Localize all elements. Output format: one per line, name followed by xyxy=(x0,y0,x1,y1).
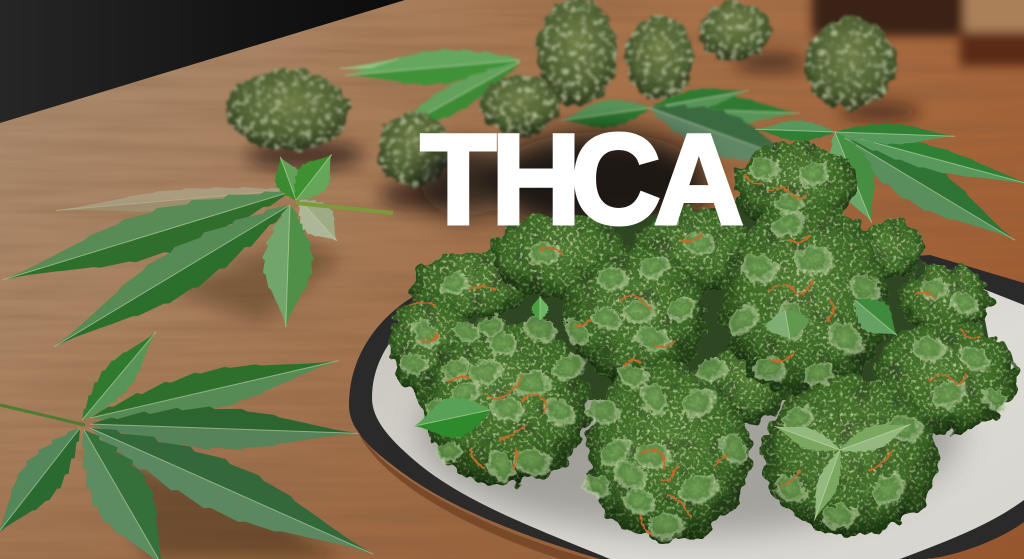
title: THCA xyxy=(420,108,744,251)
table shadows xyxy=(90,53,920,559)
bud: front left xyxy=(421,321,589,485)
bud: top right small xyxy=(700,0,770,60)
plate xyxy=(349,255,1024,559)
small leaves on buds xyxy=(409,286,915,524)
leaf: right xyxy=(755,113,1024,259)
bud: front centre xyxy=(586,362,750,542)
shadow behind title xyxy=(420,132,710,232)
bud: rear centre xyxy=(490,213,630,297)
orange hair strands xyxy=(410,175,980,535)
background buds xyxy=(226,0,895,188)
dark background corner xyxy=(0,0,405,123)
bud: left xyxy=(390,293,470,397)
bud pile xyxy=(390,141,1017,542)
bud: centre xyxy=(565,247,705,383)
blurred bottle in background xyxy=(812,0,1024,66)
bud: filler between centre and right xyxy=(705,345,785,425)
bud: rear right xyxy=(633,208,757,292)
leaf: top centre background xyxy=(340,42,527,152)
bud: behind title left xyxy=(378,112,450,188)
plate inner surface xyxy=(372,268,1024,559)
bud: right xyxy=(873,323,1017,433)
plate shadow under buds xyxy=(420,325,960,535)
plate rim xyxy=(349,255,1024,559)
mass under buds xyxy=(400,205,1000,400)
leaf: bottom left xyxy=(0,321,384,559)
bud: right upper xyxy=(899,264,991,336)
bud: top centre tall xyxy=(537,0,617,106)
bud: rear left xyxy=(412,250,528,320)
bud: top centre right xyxy=(626,16,694,100)
bud: behind leaf xyxy=(480,75,560,135)
frosted lobes on buds xyxy=(398,155,1014,541)
bud: top right xyxy=(805,18,895,110)
bud: far left xyxy=(226,70,350,150)
leaf: middle behind title xyxy=(559,80,808,185)
bud: top right xyxy=(733,141,857,229)
plate outer copper edge xyxy=(355,425,590,559)
leaf: centre left xyxy=(0,143,393,367)
bud: far right rear xyxy=(856,220,924,280)
bud: main upper right xyxy=(721,204,889,396)
bud: front right xyxy=(762,376,938,536)
